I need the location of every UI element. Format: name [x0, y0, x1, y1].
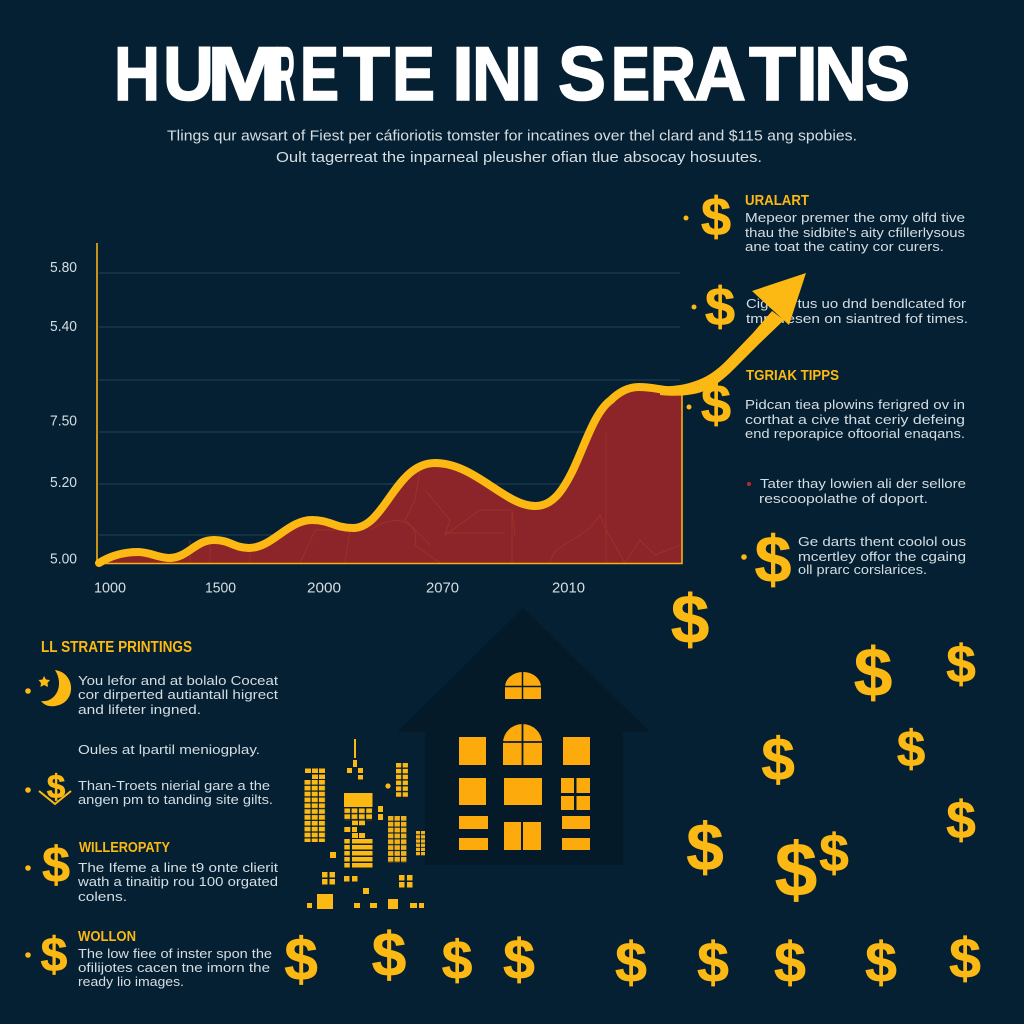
x axis labels	[94, 580, 585, 596]
title: E	[611, 32, 650, 117]
note: tgriak tipps: end reporapice oftoorial enaqans.	[745, 427, 965, 441]
note: wollon: The low fiee of inster spon the	[78, 947, 272, 961]
bottom row of dollar signs: $	[442, 929, 472, 991]
note: tater	[747, 477, 966, 506]
note: moon: and lifeter ingned.	[78, 703, 201, 717]
note: wollon: ready lio images.	[78, 975, 184, 989]
bottom row of dollar signs: $	[774, 931, 806, 995]
subtitle	[167, 128, 857, 166]
scattered dollar signs: $	[946, 635, 976, 694]
note: wileropaty: colens.	[78, 890, 127, 904]
area under curve	[97, 387, 682, 563]
left column notes	[25, 639, 279, 989]
subtitle: Tlings qur awsart of Fiest per cáfioriotis tomster for incatines over thel clard and $115 ang spobies.	[167, 128, 857, 144]
scattered dollar signs: $	[761, 726, 795, 793]
bottom row of dollar signs	[284, 921, 981, 995]
bottom row of dollar signs: $	[865, 931, 897, 995]
axes	[97, 243, 682, 564]
note: tgriak tipps	[686, 368, 965, 441]
x axis labels: 1000	[94, 580, 126, 596]
middle arched window	[503, 724, 542, 765]
note: moon: cor dirperted autiantall higrect	[78, 688, 279, 702]
note: uralart: $	[701, 187, 731, 247]
scattered dollar signs: $	[775, 828, 817, 913]
note: than-troets: Than-Troets nierial gare a the	[78, 779, 270, 793]
scattered dollar signs: $	[854, 634, 892, 711]
note: uralart: Mepeor premer the omy olfd tive	[745, 211, 965, 225]
note: wollon: WOLLON	[78, 929, 136, 945]
scattered dollar signs: $	[671, 581, 709, 658]
note: uralart	[684, 187, 965, 254]
note: than-troets: angen pm to tanding site gilts.	[78, 793, 273, 807]
right column notes	[684, 187, 968, 596]
title: E	[392, 32, 435, 117]
note: tater: rescoopolathe of doport.	[759, 492, 928, 506]
note: uralart: ane toat the catiny cor curers.	[745, 240, 944, 254]
title: I	[796, 32, 818, 117]
note: tgriak tipps: TGRIAK TIPPS	[746, 368, 839, 384]
note: than-troets	[25, 768, 273, 807]
note: moon	[25, 670, 279, 717]
pixel city skyline	[304, 739, 426, 909]
title: S	[865, 32, 910, 117]
title: T	[343, 32, 390, 117]
note: second item: Cigs ar tus uo dnd bendlcated for	[746, 297, 966, 311]
title: E	[300, 32, 339, 117]
title: H	[114, 32, 160, 117]
house silhouette with lit windows	[397, 608, 650, 865]
note: second item: tmpr resen on siantred fof times.	[746, 312, 968, 326]
title	[114, 32, 910, 117]
line and area chart	[50, 243, 682, 596]
section heading: LL STRATE PRINTINGS	[41, 639, 192, 656]
note: ge darts: $	[755, 522, 791, 596]
trend line	[99, 387, 680, 563]
title: I	[452, 32, 474, 117]
note: tgriak tipps: corthat a cive that ceriy defeing	[745, 413, 965, 427]
top arched window	[505, 672, 541, 699]
note: second item	[692, 277, 968, 337]
title: U	[163, 32, 214, 117]
icon: dollar with chevron	[39, 768, 71, 805]
icon: dollar with chevron: $	[47, 768, 65, 805]
x axis labels: 1500	[205, 580, 236, 596]
bottom row of dollar signs: $	[503, 928, 535, 992]
title: R	[275, 32, 295, 117]
area texture lines	[190, 432, 680, 563]
title: N	[472, 32, 522, 117]
note: second item: $	[705, 277, 735, 337]
note: uralart: thau the sidbite's aity cfillerlysous	[745, 226, 965, 240]
x axis labels: 2070	[426, 580, 459, 596]
scattered dollar signs	[671, 581, 976, 913]
note: tgriak tipps: Pidcan tiea plowins ferigred ov in	[745, 398, 965, 412]
title: M	[207, 32, 283, 117]
windows	[459, 737, 590, 850]
note: ge darts	[741, 522, 966, 596]
x axis labels: 2000	[307, 580, 341, 596]
note: wollon	[25, 929, 272, 989]
title: N	[814, 32, 867, 117]
bottom row of dollar signs: $	[284, 926, 318, 993]
title: T	[749, 32, 796, 117]
note: ge darts: oll prarc corslarices.	[798, 563, 927, 577]
note: moon: You lefor and at bolalo Coceat	[78, 674, 279, 688]
y axis labels: 7.50	[50, 414, 77, 430]
y axis labels: 5.20	[50, 475, 77, 491]
title: I	[520, 32, 542, 117]
note: wileropaty: The Ifeme a line t9 onte clierit	[78, 861, 279, 875]
scattered dollar signs: $	[897, 720, 925, 777]
x axis labels: 2010	[552, 580, 585, 596]
note: wileropaty: wath a tinaitip rou 100 orgated	[77, 875, 278, 889]
scattered dollar signs: $	[686, 810, 724, 885]
note: wileropaty: $	[42, 837, 70, 893]
note: tater: Tater thay lowien ali der sellore	[760, 477, 966, 491]
note: wollon: ofilijotes cacen tne imorn the	[78, 961, 270, 975]
bottom row of dollar signs: $	[372, 921, 406, 990]
scattered dollar signs: $	[946, 791, 976, 850]
icon: crescent moon and star	[38, 670, 71, 706]
note: uralart: URALART	[745, 193, 809, 209]
title: A	[694, 32, 746, 117]
rising arrow	[660, 273, 806, 396]
note: wileropaty: WILLEROPATY	[79, 840, 170, 856]
note: oules: Oules at lpartil meniogplay.	[78, 743, 260, 757]
bottom row of dollar signs: $	[697, 931, 729, 995]
bottom row of dollar signs: $	[615, 931, 647, 995]
y axis labels: 5.40	[50, 319, 77, 335]
note: ge darts: Ge darts thent coolol ous	[798, 535, 966, 549]
note: wileropaty	[25, 837, 279, 904]
y axis labels	[50, 260, 77, 568]
note: tgriak tipps: $	[701, 374, 731, 434]
note: wollon: $	[41, 929, 68, 982]
note: ge darts: mcertley offor the cgaing	[798, 550, 966, 564]
scattered dollar signs: $	[819, 824, 849, 883]
y axis labels: 5.80	[50, 260, 77, 276]
title: R	[650, 32, 696, 117]
y axis labels: 5.00	[50, 552, 77, 568]
bottom row of dollar signs: $	[949, 927, 981, 991]
title: S	[558, 32, 606, 117]
subtitle: Oult tagerreat the inparneal pleusher ofian tlue absocay hosuutes.	[276, 150, 762, 166]
